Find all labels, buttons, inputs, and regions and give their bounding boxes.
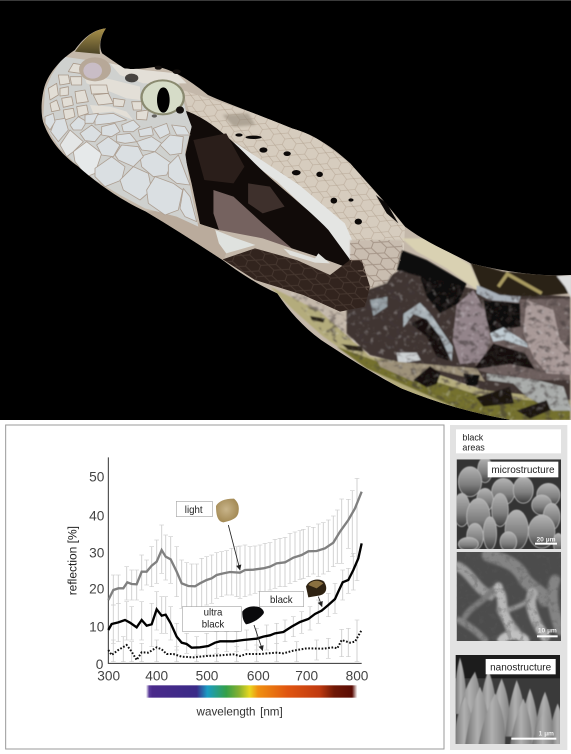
panel: reflection chart bbox=[6, 425, 444, 749]
scale bar 1 µm: 1 µm bbox=[539, 731, 554, 738]
snake photo bbox=[42, 28, 571, 420]
white stripe bbox=[234, 142, 352, 260]
arrow: ultra black bbox=[254, 625, 263, 651]
neck scale outlines bbox=[350, 240, 403, 290]
upper small scales bbox=[48, 63, 148, 120]
curve: light bbox=[108, 492, 362, 600]
x axis labels: 800 bbox=[346, 668, 369, 683]
dark specks near eye bbox=[125, 66, 184, 118]
y axis labels: 0 bbox=[96, 657, 104, 672]
arrow: black bbox=[318, 597, 322, 607]
dark brown jaw band bbox=[223, 248, 370, 312]
x axis labels: 600 bbox=[247, 668, 270, 683]
scale sample: ultra black bbox=[242, 606, 264, 624]
scale sample: black bbox=[306, 580, 326, 597]
arrow: light bbox=[228, 525, 240, 570]
head back and side markings bbox=[146, 90, 405, 287]
y axis title: reflection [%] bbox=[66, 526, 80, 595]
photo panel: black background bbox=[0, 0, 571, 422]
dark scale spots bbox=[235, 133, 398, 225]
y axis labels: 40 bbox=[89, 508, 105, 523]
ultra black patch bbox=[182, 110, 350, 267]
label: nanostructure: nanostructure bbox=[490, 662, 552, 673]
body base bbox=[347, 270, 570, 400]
y axis labels bbox=[89, 469, 105, 672]
panel: black areas micrographs bbox=[450, 425, 567, 750]
dark body blotches bbox=[483, 300, 521, 334]
black neck patch bbox=[397, 250, 467, 313]
label: light: light bbox=[185, 505, 203, 516]
heading: black areas: black bbox=[462, 433, 484, 443]
label: microstructure: microstructure bbox=[491, 465, 555, 476]
label: black: black bbox=[270, 595, 293, 606]
pink-grey right side bbox=[470, 298, 570, 380]
nostril bbox=[79, 57, 111, 81]
x axis labels: 400 bbox=[145, 668, 168, 683]
white mouth line bbox=[283, 248, 330, 263]
eye bbox=[140, 79, 185, 115]
head base bbox=[43, 57, 198, 227]
label: microstructure bbox=[488, 462, 558, 477]
x axis labels: 500 bbox=[196, 668, 219, 683]
head scales bbox=[43, 57, 198, 227]
horn, nostril and eye bbox=[75, 28, 185, 118]
label: ultra black: black bbox=[202, 620, 224, 631]
micrograph: close-up bbox=[457, 552, 561, 641]
tan neck scales bbox=[350, 240, 403, 290]
label: nanostructure bbox=[486, 659, 556, 674]
curve: ultra black bbox=[108, 630, 362, 660]
brown patches bbox=[213, 190, 292, 248]
dorsal band bbox=[470, 262, 568, 297]
panel background bbox=[450, 425, 567, 750]
heading: black areas bbox=[456, 429, 561, 453]
scale bar 20 µm: 20 µm bbox=[536, 536, 556, 543]
y axis labels: 50 bbox=[89, 469, 105, 484]
panel frame bbox=[6, 425, 444, 749]
curve: black bbox=[108, 543, 362, 648]
jaw strip and white lip bbox=[146, 210, 226, 261]
snake silhouette bbox=[42, 28, 571, 420]
throat olive bbox=[270, 287, 570, 420]
horn bbox=[75, 28, 106, 54]
y axis labels: 10 bbox=[89, 619, 105, 634]
label: black bbox=[259, 591, 304, 607]
cream neck strip bbox=[404, 238, 481, 290]
mottled neck and body bbox=[223, 238, 571, 422]
scale bar 10 µm: 10 µm bbox=[538, 627, 557, 634]
label: light bbox=[176, 501, 212, 517]
y axis labels: 20 bbox=[89, 582, 105, 597]
x axis title: wavelength [nm] bbox=[196, 706, 283, 719]
micrograph: nanostructure bbox=[456, 655, 560, 744]
pale body blotches bbox=[490, 327, 527, 347]
x axis labels: 700 bbox=[295, 668, 318, 683]
x axis labels bbox=[97, 668, 369, 683]
colour spectrum bar bbox=[146, 685, 357, 698]
label: ultra black bbox=[182, 607, 241, 631]
lower dark spots bbox=[413, 366, 441, 387]
body texture bbox=[291, 270, 570, 420]
scale sample: light bbox=[216, 499, 239, 522]
pale crown zones bbox=[83, 63, 187, 120]
heading: black areas: areas bbox=[462, 443, 485, 453]
large white-blue scales bbox=[45, 113, 197, 222]
error bars bbox=[113, 478, 357, 662]
micrograph: microstructure bbox=[456, 459, 561, 549]
x axis labels: 300 bbox=[97, 668, 120, 683]
label: ultra black: ultra bbox=[204, 608, 223, 619]
y axis labels: 30 bbox=[89, 545, 105, 560]
axes bbox=[108, 457, 362, 663]
